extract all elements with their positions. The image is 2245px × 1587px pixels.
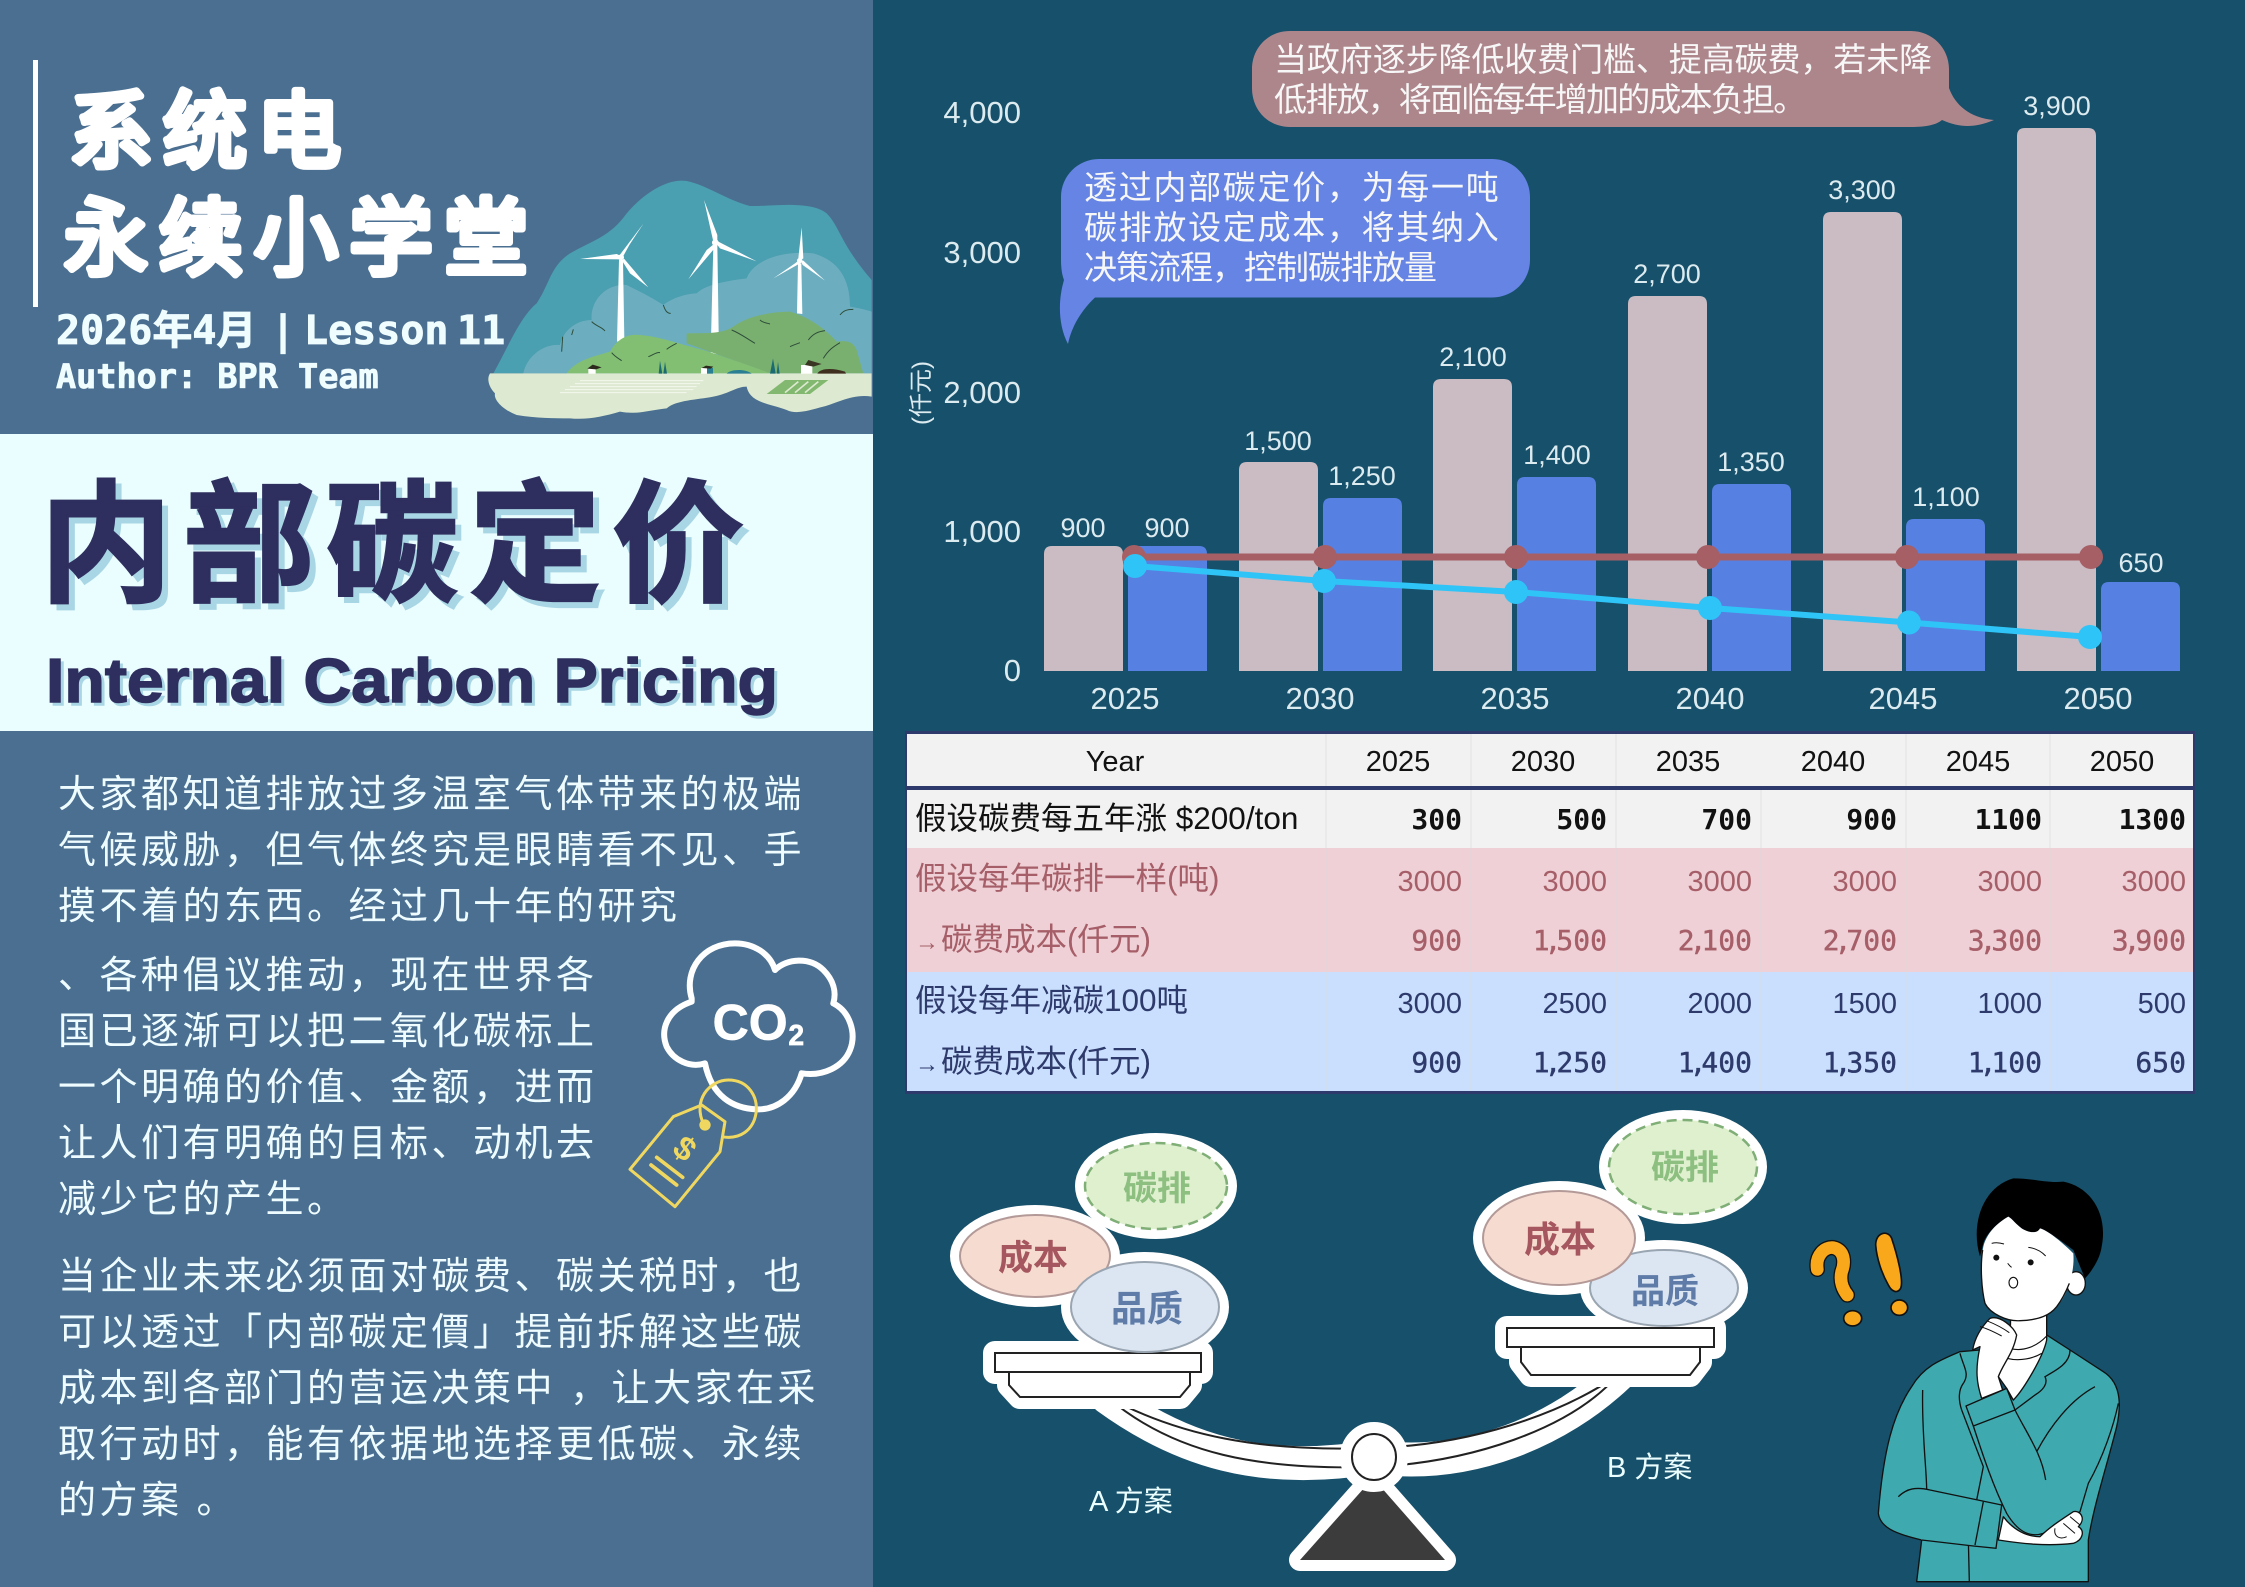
- shirt and neck: [1998, 1315, 2047, 1400]
- author line: Author: BPR Team: [56, 357, 379, 396]
- value labels: 1,400: [1523, 440, 1591, 470]
- bars: reduced emissions: [1128, 477, 2180, 671]
- row: carbon fee: [915, 800, 2186, 836]
- text block: intro paragraph: 摸不着的东西。经过几十年的研究: [58, 886, 681, 928]
- illustration: balance scale comparing plans: [950, 1110, 1767, 1560]
- text block: internal pricing paragraph: [58, 1256, 819, 1522]
- text block: carbon value paragraph: 让人们有明确的目标、动机去: [58, 1123, 598, 1165]
- line: carbon price, constant emissions: [1122, 545, 2103, 569]
- text block: carbon value paragraph: 国已逐渐可以把二氧化碳标上: [58, 1011, 598, 1053]
- table header row: 2040: [1801, 746, 1865, 778]
- value labels: 1,350: [1717, 447, 1785, 477]
- table header row: 2035: [1656, 746, 1720, 778]
- row: carbon fee: 300: [1411, 803, 1462, 836]
- plan A bubble: cost: [960, 1215, 1110, 1297]
- row: constant emissions cost: →: [915, 929, 939, 956]
- plan A pan: [995, 1353, 1201, 1397]
- plan B bubble: carbon: 碳排: [1651, 1149, 1719, 1187]
- callout: internal carbon price explanation: 透过内部碳定价，为每一吨: [1084, 169, 1500, 206]
- lower forearm: [1898, 1488, 2002, 1548]
- row: constant emissions: 3000: [1832, 866, 1897, 898]
- plan A bubble: carbon: 碳排: [1123, 1170, 1191, 1208]
- table header row: [1086, 746, 2154, 778]
- text block: intro paragraph: 气候威胁，但气体终究是眼睛看不见、手: [58, 830, 805, 872]
- row: constant emissions cost: 900: [1411, 924, 1462, 957]
- row: reduced emissions: 假设每年减碳100吨: [915, 982, 1188, 1018]
- x axis years: 2030: [1286, 681, 1354, 716]
- row: reduced emissions cost: 碳费成本(仟元): [941, 1043, 1151, 1079]
- row: constant emissions: 3000: [1977, 866, 2042, 898]
- row: constant emissions cost: 碳费成本(仟元): [941, 921, 1151, 957]
- icon: CO2 cloud with price tag: $: [666, 1129, 703, 1170]
- text block: internal pricing paragraph: 取行动时，能有依据地选择更低碳、永续: [58, 1424, 805, 1466]
- row: carbon fee: 700: [1701, 803, 1752, 836]
- y axis labels: 3,000: [943, 235, 1021, 270]
- y axis labels: 4,000: [943, 95, 1021, 130]
- plan B bubble: cost: [1483, 1191, 1635, 1285]
- panel: left column: [0, 0, 873, 1587]
- plan A bubble: quality: 品质: [1111, 1288, 1183, 1329]
- row: reduced emissions cost: 1,350: [1823, 1046, 1897, 1079]
- table: carbon cost calculation: [905, 731, 2195, 1094]
- jacket: [1878, 1335, 2119, 1582]
- label: plan A: A 方案: [1089, 1485, 1173, 1518]
- row: carbon fee: 500: [1556, 803, 1607, 836]
- table header row: 2045: [1946, 746, 2010, 778]
- y axis labels: 0: [1004, 653, 1021, 688]
- callout: rising cost warning: 当政府逐步降低收费门槛、提高碳费，若未降: [1274, 41, 1932, 78]
- table header row: Year: [1086, 746, 1145, 778]
- table header row: 2050: [2090, 746, 2154, 778]
- row: carbon fee: 1300: [2119, 803, 2186, 836]
- row: reduced emissions: 2000: [1687, 988, 1752, 1020]
- illustration: wind turbines landscape: [488, 181, 872, 419]
- x axis years: 2045: [1869, 681, 1937, 716]
- row: reduced emissions: 2500: [1542, 988, 1607, 1020]
- row: reduced emissions: 1500: [1832, 988, 1897, 1020]
- hand on chin: [1973, 1318, 2017, 1398]
- plan B bubble: quality: 品质: [1631, 1273, 1699, 1311]
- row: reduced emissions: [915, 982, 2186, 1020]
- row: reduced emissions cost: 650: [2135, 1046, 2186, 1079]
- hair: [1977, 1178, 2103, 1278]
- row: constant emissions: 3000: [1687, 866, 1752, 898]
- row: reduced emissions cost: 1,250: [1533, 1046, 1607, 1079]
- row: carbon fee: 假设碳费每五年涨 $200/ton: [915, 800, 1298, 836]
- face: [1982, 1217, 2074, 1321]
- x axis years: [1091, 681, 2132, 716]
- text block: internal pricing paragraph: 成本到各部门的营运决策中 ，让大家在采: [58, 1368, 819, 1410]
- row: carbon fee: 900: [1846, 803, 1897, 836]
- value labels: 900: [1060, 513, 1106, 543]
- plan B pan: [1507, 1328, 1714, 1375]
- text block: internal pricing paragraph: 当企业未来必须面对碳费、碳关税时，也: [58, 1256, 805, 1298]
- callout: internal carbon price explanation: 决策流程，控制碳排放量: [1084, 249, 1436, 286]
- row: constant emissions cost: 2,700: [1823, 924, 1897, 957]
- row: reduced emissions: 500: [2138, 988, 2186, 1020]
- row: reduced emissions cost: 1,100: [1968, 1046, 2042, 1079]
- x axis years: 2050: [2064, 681, 2132, 716]
- row: reduced emissions cost: 1,400: [1678, 1046, 1752, 1079]
- bars: constant emissions: [1044, 128, 2096, 671]
- callout: internal carbon price explanation: 碳排放设定成本，将其纳入: [1084, 209, 1500, 246]
- value labels: 2,100: [1439, 342, 1507, 372]
- table header row: 2025: [1366, 746, 1430, 778]
- icon: CO2 cloud with price tag: CO: [713, 994, 788, 1050]
- callout: rising cost warning: [1252, 31, 1994, 127]
- text block: internal pricing paragraph: 可以透过「内部碳定價」提前拆解这些碳: [58, 1312, 805, 1354]
- scale halo and beam: [1107, 1375, 1618, 1560]
- value labels: [1060, 91, 2164, 578]
- row: constant emissions: 3000: [1397, 866, 1462, 898]
- value labels: 2,700: [1633, 259, 1701, 289]
- row: constant emissions: 假设每年碳排一样(吨): [915, 860, 1219, 896]
- text block: intro paragraph: 大家都知道排放过多温室气体带来的极端: [58, 774, 805, 816]
- value labels: 3,300: [1828, 175, 1896, 205]
- row: constant emissions cost: 3,300: [1968, 924, 2042, 957]
- value labels: 3,900: [2023, 91, 2091, 121]
- icon: CO2 cloud with price tag: [630, 943, 853, 1207]
- date and lesson line: |: [271, 308, 295, 355]
- row: constant emissions: [915, 860, 2186, 898]
- y axis labels: [943, 95, 1021, 688]
- row: constant emissions cost: 3,900: [2112, 924, 2186, 957]
- text block: carbon value paragraph: [58, 955, 598, 1221]
- row: constant emissions cost: [915, 921, 2186, 957]
- row: constant emissions: 3000: [2121, 866, 2186, 898]
- bubble halos: [950, 1110, 1767, 1362]
- value labels: 900: [1144, 513, 1190, 543]
- row: reduced emissions cost: →: [915, 1051, 939, 1078]
- x axis years: 2035: [1481, 681, 1549, 716]
- label: plan B: B 方案: [1607, 1451, 1692, 1484]
- row: reduced emissions cost: 900: [1411, 1046, 1462, 1079]
- text block: carbon value paragraph: 减少它的产生。: [58, 1179, 349, 1221]
- date and lesson line: Lesson: [304, 308, 448, 354]
- table header row: 2030: [1511, 746, 1575, 778]
- row: carbon fee: 1100: [1975, 803, 2042, 836]
- y axis title: (仟元): [908, 361, 935, 425]
- value labels: 1,250: [1328, 461, 1396, 491]
- text block: internal pricing paragraph: 的方案 。: [58, 1480, 238, 1522]
- row: reduced emissions: 1000: [1977, 988, 2042, 1020]
- header: lesson title: [33, 60, 539, 307]
- callout: rising cost warning: 低排放，将面临每年增加的成本负担。: [1274, 81, 1804, 118]
- y axis labels: 1,000: [943, 514, 1021, 549]
- plan B bubble: cost: 成本: [1524, 1219, 1596, 1260]
- header: lesson title: 系统电: [69, 85, 351, 179]
- value labels: 650: [2118, 548, 2164, 578]
- icon: CO2 cloud with price tag: 2: [788, 1020, 804, 1052]
- row: constant emissions cost: 2,100: [1678, 924, 1752, 957]
- main title: English: Internal Carbon Pricing: [46, 647, 778, 716]
- row: constant emissions cost: 1,500: [1533, 924, 1607, 957]
- x axis years: 2025: [1091, 681, 1159, 716]
- value labels: 1,500: [1244, 426, 1312, 456]
- illustration: thinking person: [1878, 1178, 2119, 1582]
- ear: [2067, 1272, 2085, 1295]
- date and lesson line: 11: [457, 308, 505, 354]
- header: lesson title: 永续小学堂: [64, 192, 539, 286]
- facial features: [1992, 1243, 2046, 1288]
- plan A bubble: carbon: [1085, 1143, 1227, 1229]
- row: reduced emissions cost: [915, 1043, 2186, 1079]
- value labels: 1,100: [1912, 482, 1980, 512]
- plan A bubble: cost: 成本: [998, 1239, 1068, 1278]
- lower hand: [1998, 1511, 2082, 1545]
- chart: carbon cost by year: [908, 91, 2180, 716]
- y axis labels: 2,000: [943, 375, 1021, 410]
- x axis years: 2040: [1676, 681, 1744, 716]
- plan A bubble: quality: [1071, 1262, 1219, 1352]
- plan B bubble: quality: [1590, 1250, 1738, 1326]
- icon: question and exclamation marks: [1817, 1233, 1908, 1326]
- text block: carbon value paragraph: 一个明确的价值、金额，进而: [58, 1067, 598, 1109]
- row: constant emissions: 3000: [1542, 866, 1607, 898]
- text block: carbon value paragraph: 、各种倡议推动，现在世界各: [58, 955, 598, 997]
- callout: internal carbon price explanation: [1060, 159, 1530, 344]
- main title: Chinese: 内部碳定价: [40, 472, 755, 619]
- text block: intro paragraph: [58, 774, 805, 928]
- row: reduced emissions: 3000: [1397, 988, 1462, 1020]
- line: carbon price, reduced emissions: [1123, 554, 2102, 649]
- date and lesson line: 2026年4月: [56, 308, 256, 354]
- sleeve cuff and arm: [1966, 1388, 2015, 1426]
- plan B bubble: carbon: [1609, 1120, 1757, 1214]
